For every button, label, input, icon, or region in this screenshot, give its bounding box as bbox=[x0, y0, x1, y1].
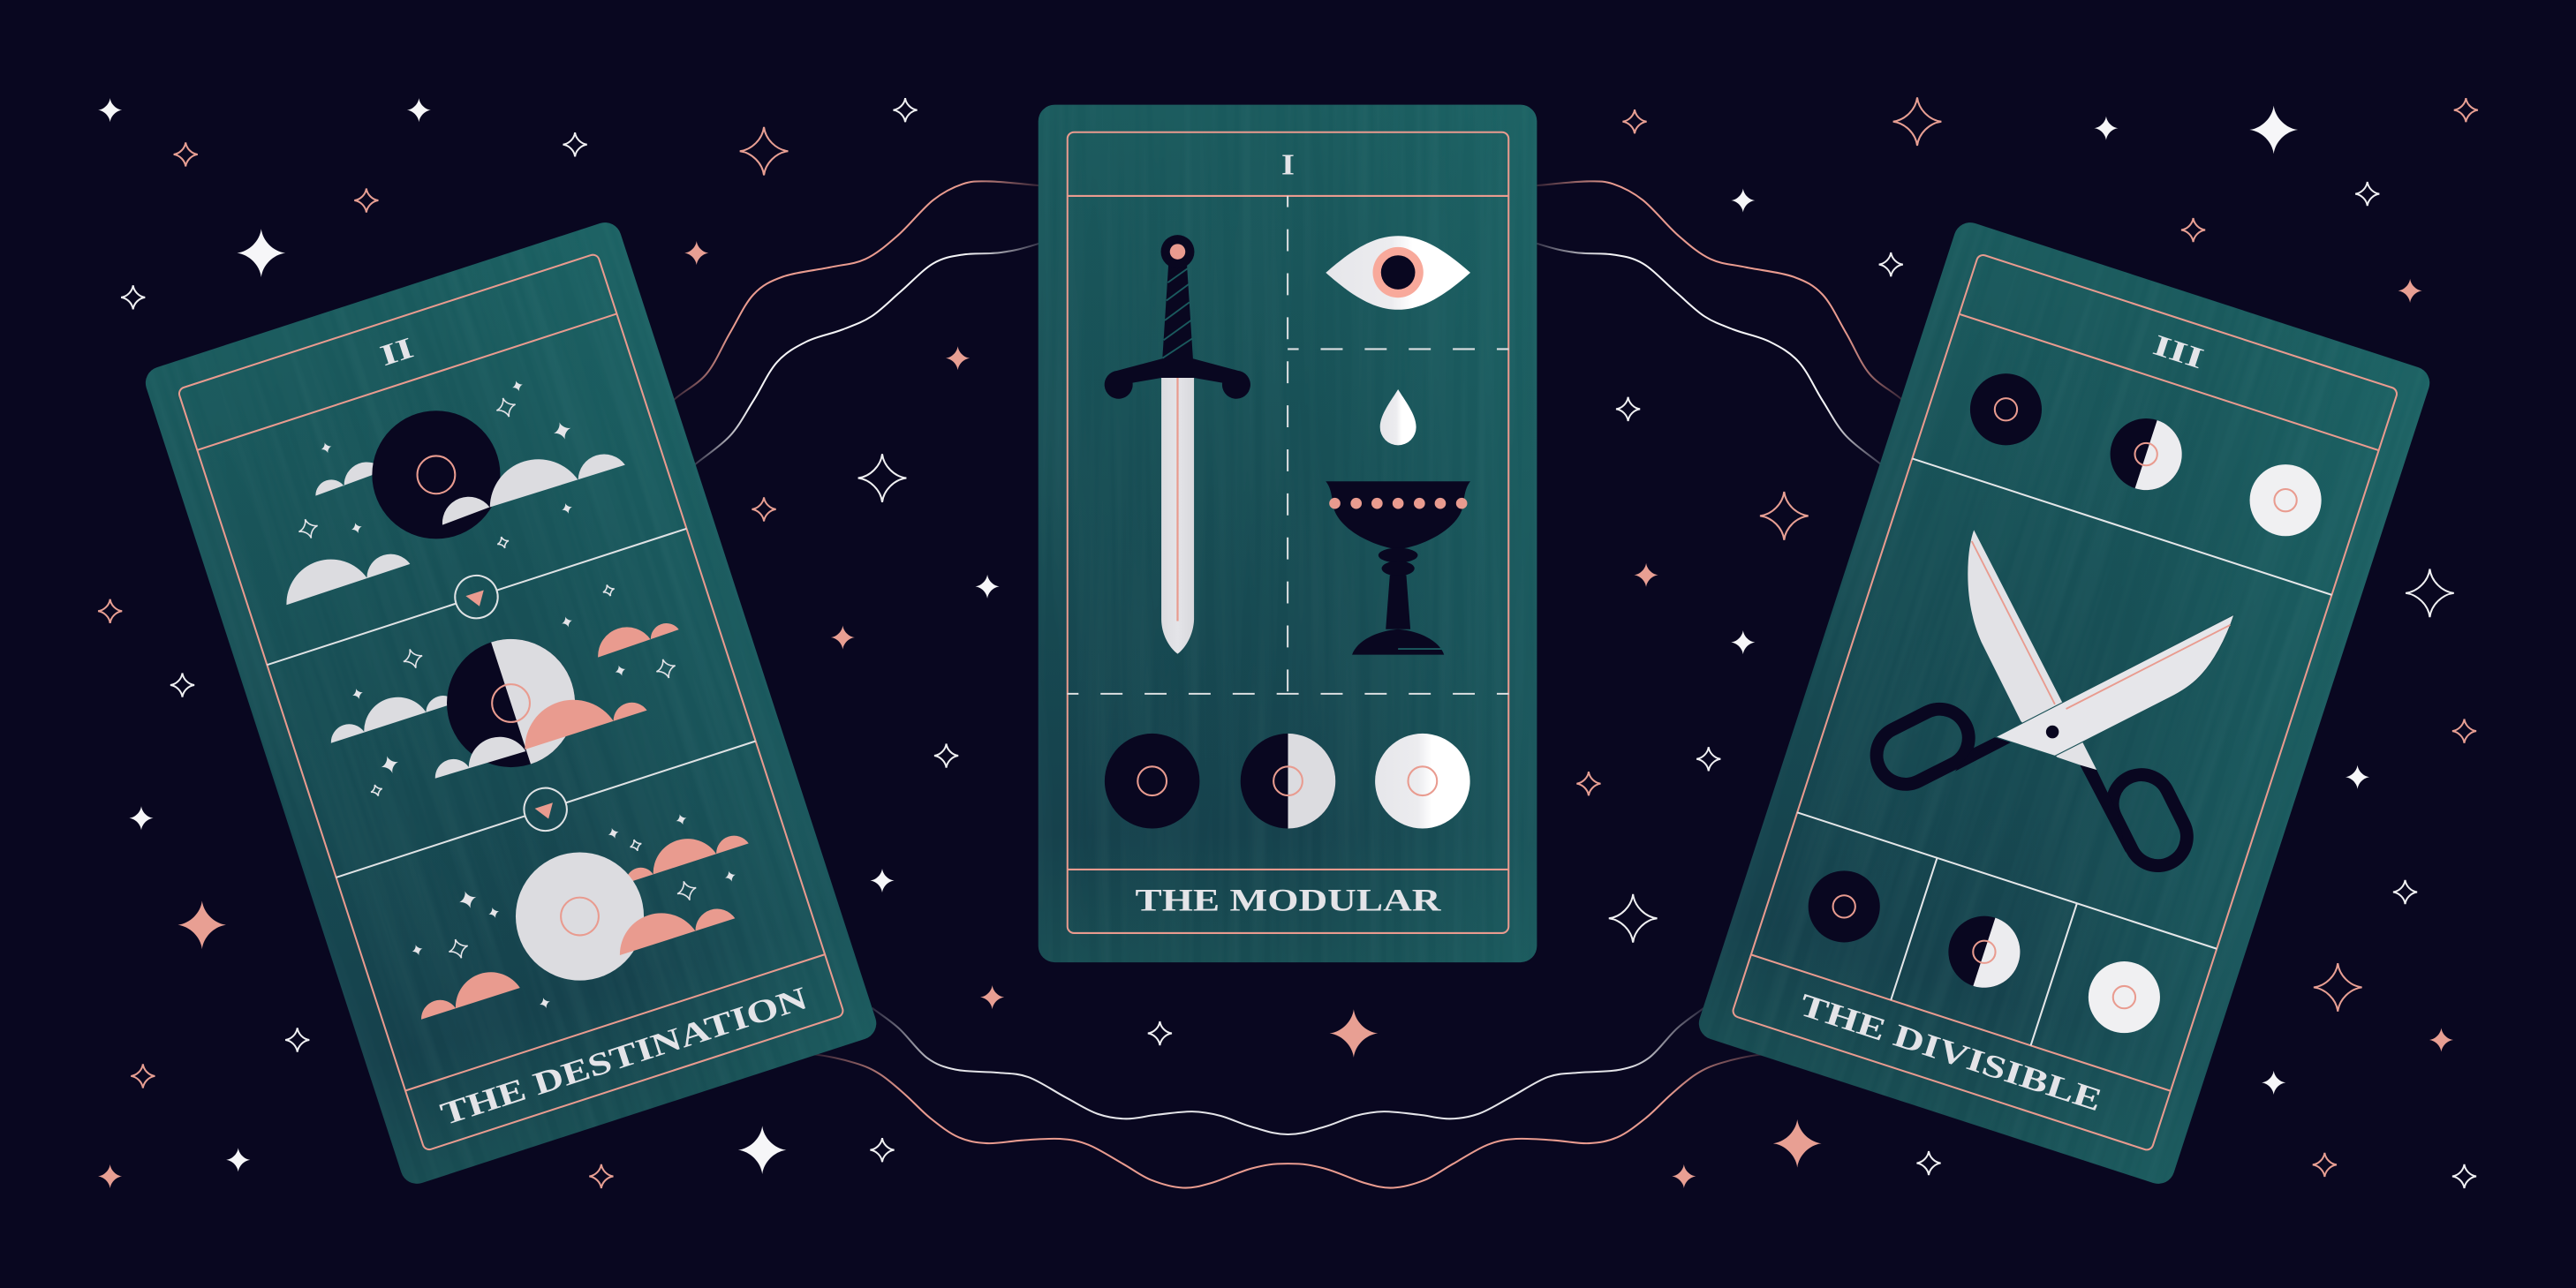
moon phases bbox=[1105, 734, 1470, 828]
pink outlined background stars bbox=[98, 97, 2478, 1188]
icon: sword bbox=[1105, 235, 1250, 654]
white outlined background stars bbox=[121, 98, 2476, 1188]
card I: The Modular bbox=[1039, 105, 1537, 962]
title: The Divisible: THE DIVISIBLE bbox=[1795, 987, 2106, 1118]
outlined sparkles on card II bbox=[296, 395, 699, 961]
dashed dividers bbox=[1067, 196, 1509, 694]
icon: drop bbox=[1380, 389, 1416, 445]
night sky scene bbox=[286, 411, 625, 605]
numeral I: I bbox=[1281, 148, 1295, 181]
numeral II: II bbox=[376, 332, 418, 373]
icon: scissors bbox=[1867, 530, 2234, 876]
card I base with frame and dividers bbox=[1039, 105, 1537, 962]
bottom moon phases bbox=[1809, 870, 2160, 1033]
full moon scene bbox=[421, 836, 749, 1020]
white filled background stars bbox=[98, 98, 2369, 1174]
numeral III: III bbox=[2149, 328, 2208, 375]
title: The Modular: THE MODULAR bbox=[1135, 883, 1442, 918]
connecting threads, bottom right bbox=[1288, 1008, 1763, 1188]
card II base with frame bbox=[141, 218, 880, 1188]
top moon phases bbox=[1970, 373, 2322, 536]
icon: chalice bbox=[1326, 481, 1470, 655]
card III: The Divisible bbox=[1695, 218, 2434, 1188]
half moon scene bbox=[331, 623, 679, 779]
sparkles on card II bbox=[319, 379, 737, 1010]
connecting threads, top left bbox=[674, 181, 1039, 464]
connecting threads, bottom left bbox=[813, 1008, 1288, 1188]
title: The Destination: THE DESTINATION bbox=[436, 980, 812, 1132]
connecting threads, top right bbox=[1537, 181, 1902, 464]
pink filled background stars bbox=[98, 241, 2453, 1188]
icon: eye bbox=[1326, 236, 1470, 310]
card III base with frame and dividers bbox=[1695, 218, 2434, 1188]
card II: The Destination bbox=[141, 218, 880, 1188]
